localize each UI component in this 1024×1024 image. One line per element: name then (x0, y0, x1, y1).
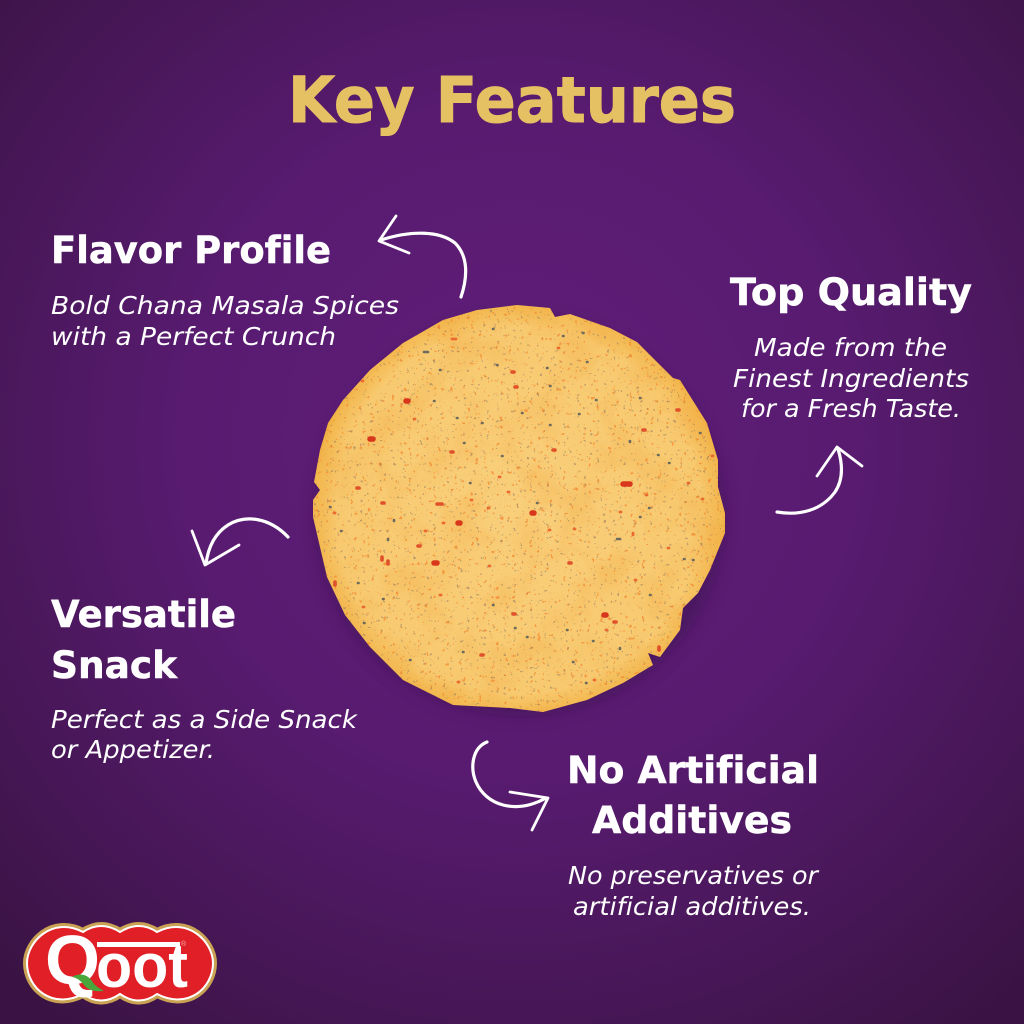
text: top quality description: for a Fresh Taste. (741, 394, 961, 423)
panel: no artificial additives (567, 749, 820, 921)
arrow: to top quality (777, 447, 862, 513)
panel: versatile snack (51, 593, 358, 764)
text: versatile snack description: or Appetizer. (51, 735, 215, 764)
logo badge inner line (27, 926, 213, 1000)
arrow: to versatile snack (192, 519, 288, 565)
heading: no artificial additives: No Artificial (567, 749, 819, 792)
logo wordmark: ® (181, 940, 187, 948)
heading: no artificial additives: Additives (592, 799, 792, 842)
logo badge (27, 926, 213, 1000)
panel: flavor profile (51, 229, 399, 351)
product image: round masala chip (313, 305, 725, 712)
heading: versatile snack: Versatile (51, 593, 236, 636)
text: no artificial additives description: No preservatives or (568, 861, 820, 890)
text: no artificial additives description (568, 861, 820, 921)
heading: top quality: Top Quality (730, 271, 972, 314)
text: top quality description (733, 333, 969, 423)
title: Key Features (288, 64, 736, 137)
logo wordmark: oot (96, 932, 188, 1001)
heading: flavor profile: Flavor Profile (51, 229, 331, 272)
text: top quality description: Finest Ingredients (733, 364, 969, 393)
panel: top quality (730, 271, 972, 423)
logo wordmark: Q (45, 921, 100, 999)
text: no artificial additives description: artificial additives. (573, 892, 811, 921)
arrow: to flavor profile (379, 216, 466, 297)
text: flavor profile description: Bold Chana Masala Spices (51, 291, 399, 320)
chip shadow (315, 316, 725, 716)
logo leaf (72, 974, 104, 991)
logo: Qoot (27, 921, 213, 1001)
logo wordmark (45, 921, 188, 1001)
heading: versatile snack (51, 593, 236, 687)
heading: versatile snack: Snack (51, 644, 178, 687)
text: flavor profile description: with a Perfect Crunch (51, 322, 336, 351)
heading: no artificial additives (567, 749, 819, 842)
text: top quality description: Made from the (754, 333, 947, 362)
text: versatile snack description (51, 705, 358, 764)
text: flavor profile description (51, 291, 399, 351)
arrow: to no artificial additives (473, 742, 548, 830)
text: versatile snack description: Perfect as a Side Snack (51, 705, 358, 734)
